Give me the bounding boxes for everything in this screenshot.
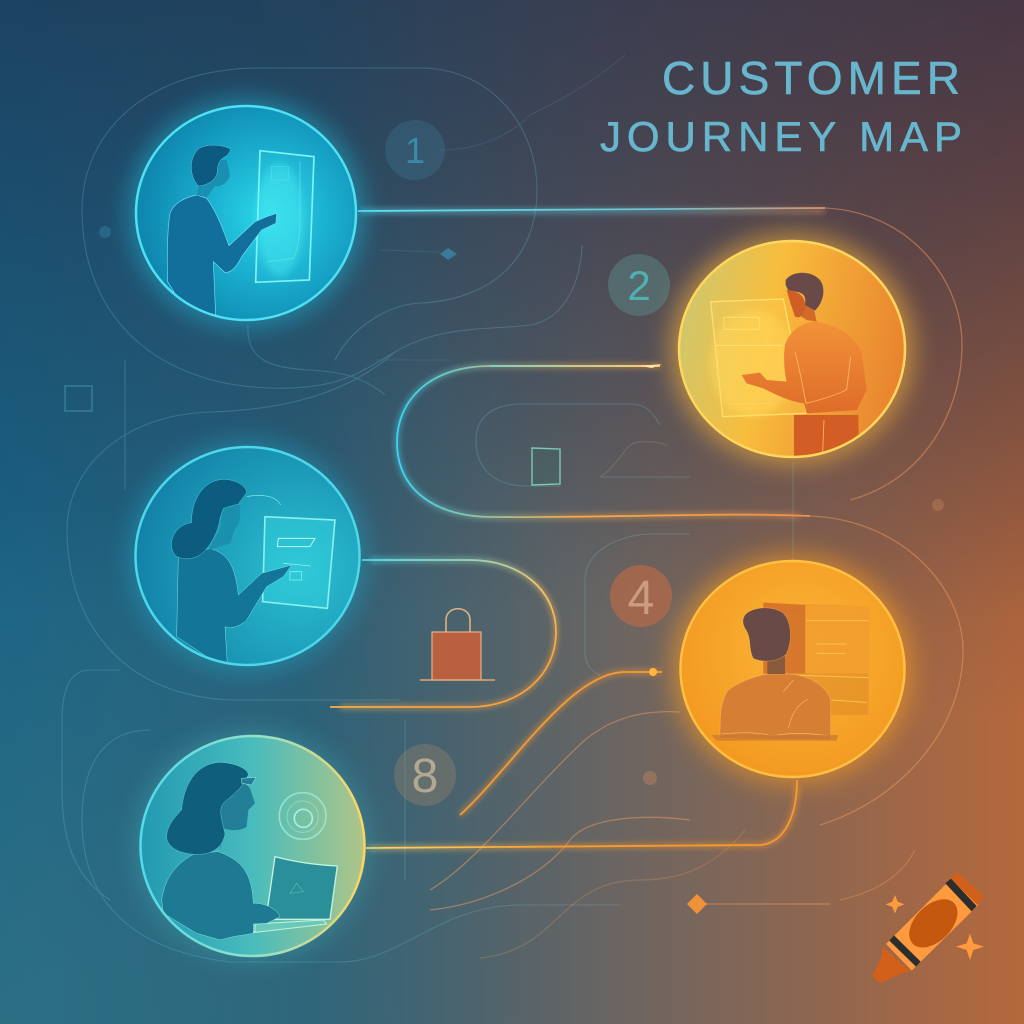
step 3 panel: woman at tablet (128, 440, 366, 672)
icon: shopping bag (420, 609, 495, 680)
screen 4 (763, 603, 869, 715)
connector line: into step 4 (460, 668, 662, 815)
person 1 silhouette (167, 145, 277, 315)
icon: diamond marker (687, 894, 707, 914)
small decorative dots (99, 226, 944, 785)
tablet 1 (256, 151, 314, 282)
concentric target icon (279, 793, 326, 839)
faint background route lines (62, 55, 793, 962)
icon: outlined square left (65, 386, 92, 411)
connector line: step 5 to step 4 (366, 780, 797, 848)
step badge 1 (385, 120, 445, 180)
step badge 2 (608, 254, 670, 316)
tablet 3 (247, 495, 335, 608)
icon: document outline (532, 448, 560, 485)
laptop 5 (254, 856, 338, 933)
step 2 panel: man at board (670, 233, 914, 465)
board 2 (710, 299, 807, 417)
person 4 silhouette (712, 608, 838, 741)
route glow (340, 211, 825, 848)
title: CUSTOMER (662, 52, 960, 104)
title (600, 52, 962, 160)
step 4 panel: person from behind at screen (672, 553, 914, 785)
step badge 2: 2 (627, 262, 651, 309)
step 5 panel: woman at laptop (134, 730, 370, 962)
connector line: step 1 to step 2 (358, 208, 825, 211)
connector line: step 2 to step 4 (397, 364, 810, 517)
person 2 silhouette (742, 273, 867, 457)
icon: crayon with sparkles (872, 872, 984, 983)
step badge 1: 1 (405, 130, 425, 171)
connector line: step 3 to bag (330, 560, 556, 707)
step 1 panel: man at tablet (128, 98, 364, 328)
faint orange route lines (430, 208, 963, 958)
step badge 8: 8 (412, 750, 438, 803)
step badge 4: 4 (628, 572, 654, 625)
person 5 silhouette (162, 762, 280, 940)
step badge 4 (610, 565, 672, 627)
title: JOURNEY MAP (600, 113, 962, 160)
step badge 8 (394, 744, 456, 806)
person 3 silhouette (171, 479, 292, 663)
